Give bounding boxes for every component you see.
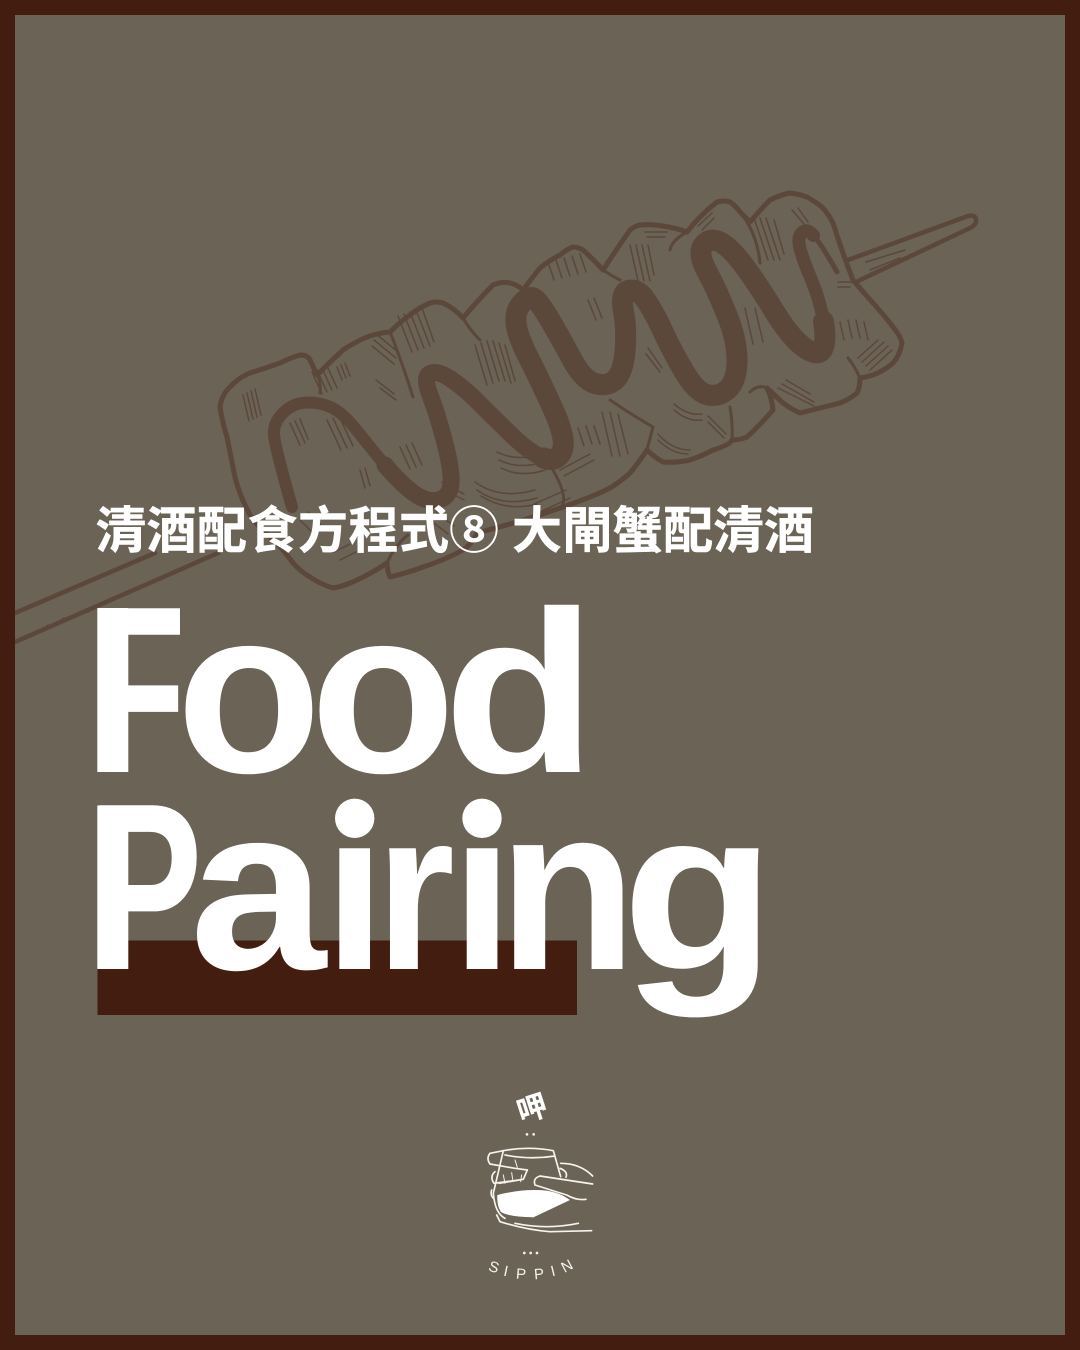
title word: Food: o [310, 561, 456, 823]
title word: Pairing: n [498, 757, 637, 1019]
meat outline [220, 193, 902, 588]
sauce third section [516, 240, 825, 459]
title word: Food: o [176, 561, 322, 823]
title word: Pairing: a [190, 757, 328, 1019]
skewer stick [15, 216, 976, 642]
title word: Food: d [444, 563, 596, 821]
logo wordmark: S [486, 1258, 501, 1277]
logo wordmark: I [502, 1263, 510, 1280]
logo wordmark: N [558, 1256, 576, 1276]
title word: Pairing [97, 798, 758, 1018]
sauce left section [274, 402, 385, 507]
main title [97, 604, 758, 1018]
title word: Pairing: i [451, 762, 513, 1018]
subtitle [96, 491, 814, 563]
sauce zigzag [274, 231, 837, 507]
title word: Pairing: r [376, 762, 455, 1018]
logo wordmark: P [515, 1266, 527, 1283]
sauce tail [799, 231, 824, 322]
logo: Sippin [486, 1081, 593, 1283]
underline bar [98, 940, 577, 1015]
logo wordmark: P [533, 1266, 545, 1283]
title word: Food [88, 557, 596, 823]
logo wordmark: I [549, 1263, 557, 1280]
title word: Food: F [88, 557, 186, 823]
logo character: 呷 [510, 1081, 552, 1132]
subtitle part one: 清酒配食方程式 [96, 491, 449, 563]
title word: Pairing: g [622, 762, 775, 1018]
illustration: grilled skewer with sauce [15, 193, 976, 642]
icon: hand holding sake cup [488, 1133, 593, 1254]
inner fold lines [310, 212, 860, 563]
sauce second section [385, 372, 544, 501]
title word: Pairing: i [324, 762, 386, 1018]
subtitle number: ⑧ [449, 491, 499, 563]
subtitle part two: 大閘蟹配清酒 [512, 491, 814, 563]
logo wordmark [486, 1256, 576, 1283]
sauce tip [814, 236, 837, 272]
title word: Pairing: P [88, 755, 203, 1021]
hatching [243, 208, 892, 560]
